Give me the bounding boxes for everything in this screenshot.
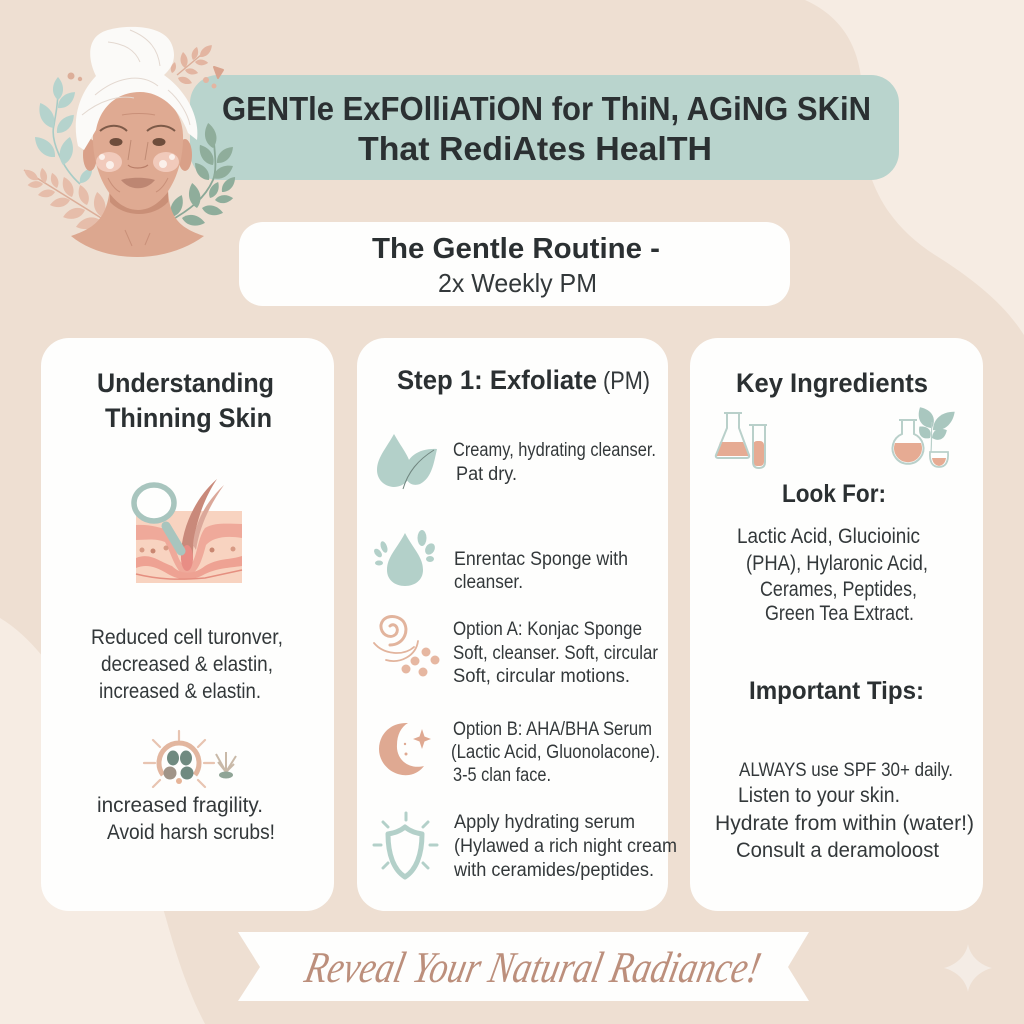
text block: decreased & elastin,	[101, 653, 273, 676]
text block: increased fragility.	[97, 794, 263, 817]
step text	[451, 719, 660, 786]
icon: flask and test tube	[716, 413, 767, 468]
routine pill: 2x Weekly PM	[438, 268, 597, 298]
step text: with ceramides/peptides.	[453, 860, 654, 881]
step text	[454, 549, 628, 593]
icon: drop with splashes	[372, 530, 437, 586]
step text	[453, 812, 677, 881]
step text	[453, 440, 656, 485]
text block: tips	[715, 760, 974, 862]
step text: (Hylawed a rich night cream	[454, 836, 677, 857]
step text: cleanser.	[454, 572, 523, 593]
ribbon banner: Reveal Your Natural Radiance!	[300, 942, 765, 992]
text block: tips: Hydrate from within (water!)	[715, 812, 974, 835]
step text: Soft, circular motions.	[453, 666, 630, 687]
text block: tips: Consult a deramoloost	[736, 839, 939, 862]
heading: Key Ingredients	[736, 368, 928, 398]
step text: (Lactic Acid, Gluonolacone).	[451, 742, 660, 763]
step text: 3-5 clan face.	[453, 765, 551, 786]
title banner	[190, 75, 899, 180]
icon: right green branch	[167, 122, 238, 228]
heading	[97, 368, 274, 433]
step text: Option A: Konjac Sponge	[453, 619, 642, 640]
heading: Understanding	[97, 368, 274, 398]
icon: skin cross-section with magnifier	[134, 479, 242, 583]
subheading: look for: Look For:	[782, 480, 886, 508]
title banner: That RediAtes HealTH	[358, 130, 712, 167]
step text: Soft, cleanser. Soft, circular	[453, 643, 659, 664]
ribbon banner	[238, 932, 809, 1001]
step text	[453, 619, 659, 687]
ears	[83, 139, 97, 171]
heading: (PM)	[603, 367, 650, 395]
icon: fragile skin sun	[144, 731, 236, 787]
text block: ingredients	[737, 525, 928, 625]
icon: drop and leaf	[377, 434, 437, 489]
portrait illustration	[22, 27, 238, 257]
subheading: important tips: Important Tips:	[749, 677, 924, 705]
title banner: GENTle ExFOlliATiON for ThiN, AGiNG SKiN	[222, 90, 871, 127]
text block: ingredients: (PHA), Hylaronic Acid,	[746, 552, 928, 575]
routine pill: The Gentle Routine -	[372, 233, 660, 265]
text block: increased & elastin.	[99, 680, 261, 703]
icon: round flask and plant	[892, 404, 959, 467]
text block: ingredients: Green Tea Extract.	[765, 602, 914, 625]
text block: Reduced cell turonver,	[91, 626, 283, 649]
icon: left teal branch	[31, 77, 95, 186]
text block: Avoid harsh scrubs!	[107, 821, 275, 844]
icon: swirl and dots	[374, 616, 440, 676]
heading: Step 1: Exfoliate	[397, 365, 597, 395]
heading: Thinning Skin	[105, 403, 272, 433]
step text: Enrentac Sponge with	[454, 549, 628, 570]
shoulders and neck	[71, 185, 204, 257]
text block	[97, 794, 275, 844]
step text: Option B: AHA/BHA Serum	[453, 719, 652, 740]
text block: ingredients: Cerames, Peptides,	[760, 578, 917, 601]
icon: moon and star	[379, 723, 431, 775]
panel: understanding thinning skin	[41, 338, 334, 911]
icon: sparkle	[944, 944, 992, 992]
icon: top pink branch	[68, 43, 223, 88]
step text: Pat dry.	[456, 464, 517, 485]
step text: Apply hydrating serum	[454, 812, 635, 833]
text block	[91, 626, 283, 703]
towel	[76, 27, 197, 150]
face	[93, 90, 183, 210]
text block: ingredients: Lactic Acid, Glucioinic	[737, 525, 920, 548]
panel: step 1 exfoliate	[357, 338, 677, 911]
icon: left pink branch	[22, 167, 107, 232]
facial features	[100, 114, 175, 192]
panel: key ingredients	[690, 338, 983, 911]
text block: tips: ALWAYS use SPF 30+ daily.	[739, 760, 953, 781]
icon: shield with rays	[374, 813, 437, 877]
routine pill	[239, 222, 790, 306]
step text: Creamy, hydrating cleanser.	[453, 440, 656, 461]
text block: tips: Listen to your skin.	[738, 784, 900, 807]
